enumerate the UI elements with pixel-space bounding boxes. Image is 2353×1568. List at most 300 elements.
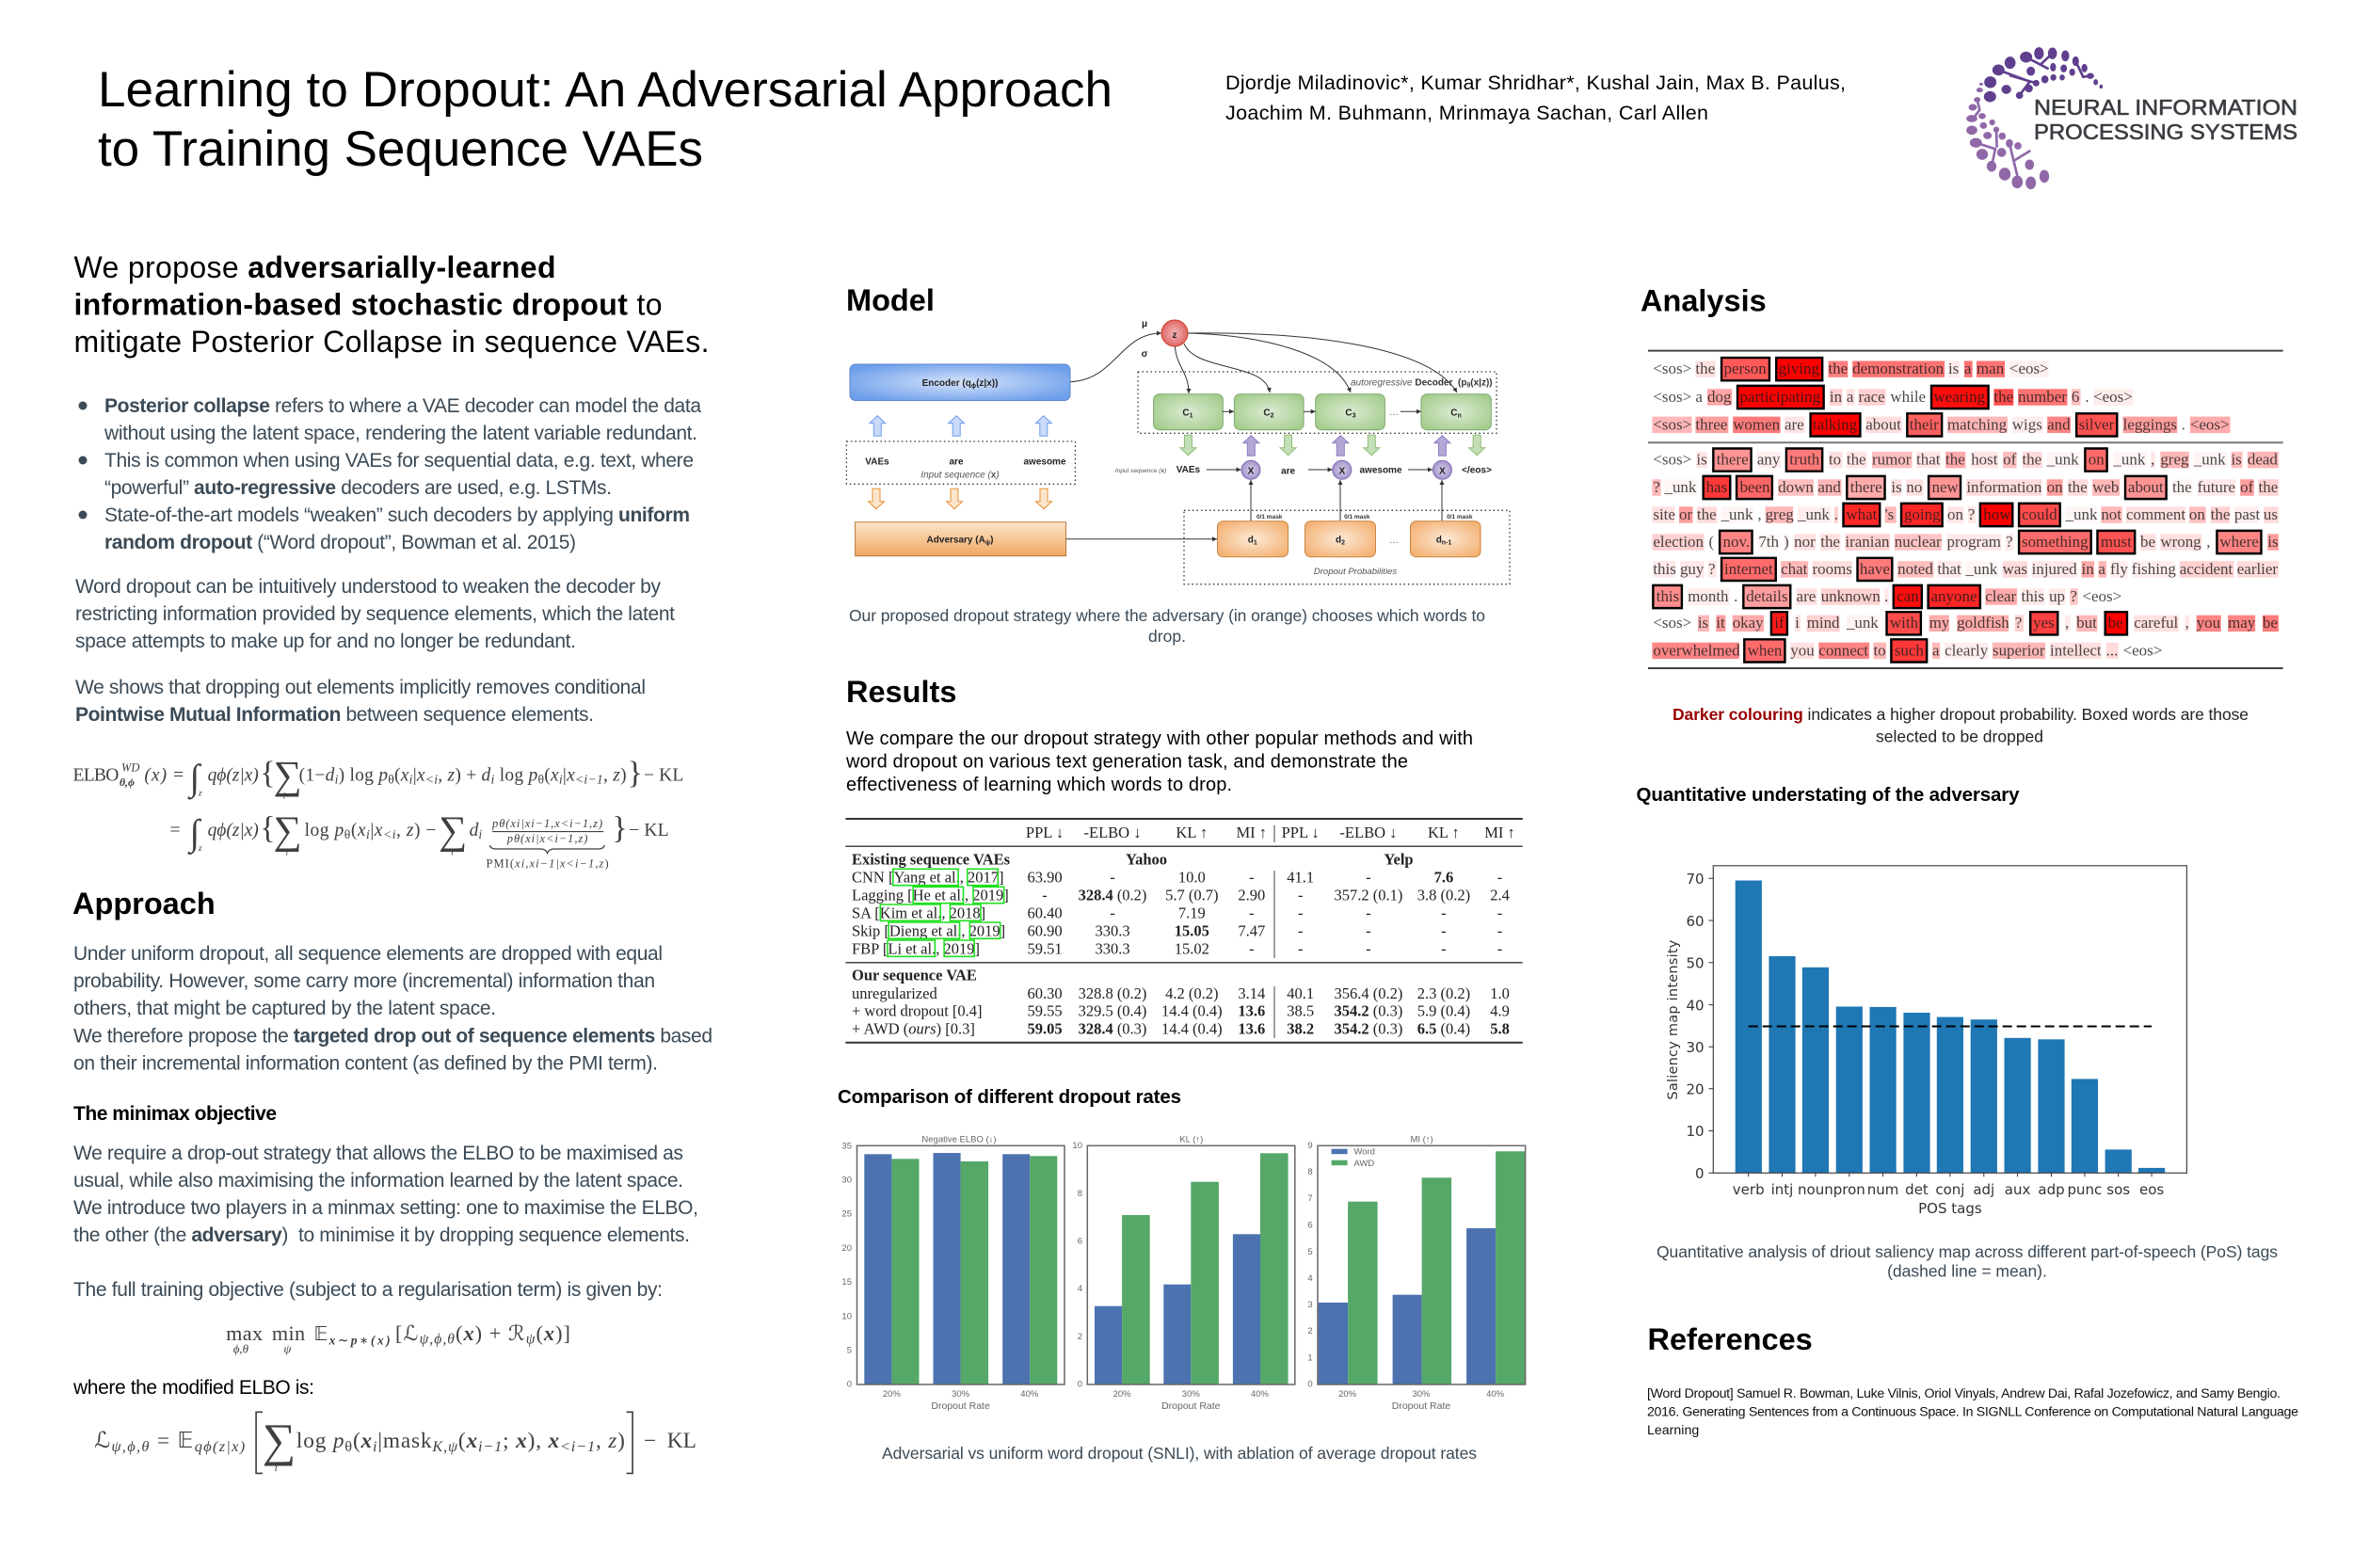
bar chart: KL: 0 — [1078, 1380, 1082, 1389]
sentence row 5: new — [1932, 478, 1960, 496]
sentence row 10: yes — [2033, 614, 2055, 632]
cell labels: n — [1457, 412, 1462, 420]
bar chart: KL: Dropout Rate — [1161, 1400, 1221, 1412]
bar chart: KL: 8 — [1078, 1189, 1082, 1199]
equation: word dropout ELBO: x — [400, 765, 409, 785]
sentence row 5: future — [2198, 478, 2235, 496]
existing VAEs values: 5.7 (0.7) — [1165, 887, 1218, 904]
text block: approach: on their incremental information content (as defined by the PMI term). — [73, 1052, 658, 1075]
sentence row 7: wrong — [2160, 533, 2201, 551]
equation: word dropout ELBO: ∫ — [188, 813, 202, 856]
sentence row 9: unknown — [1821, 587, 1881, 605]
sentence row 10: with — [1890, 614, 1919, 632]
existing VAEs values: - — [1298, 939, 1303, 957]
bar chart: negative ELBO: 20% — [883, 1389, 901, 1400]
x axis labels: sos — [2106, 1181, 2130, 1198]
sentence row 6: greg — [1766, 505, 1794, 523]
equation: word dropout ELBO: i — [366, 827, 370, 841]
our VAE values: 328.4 (0.3) — [1079, 1019, 1146, 1037]
encoder — [850, 364, 1070, 401]
sentence row 1: a — [1964, 360, 1972, 377]
existing VAEs values: - — [1366, 921, 1371, 939]
existing VAEs values: 357.2 (0.1) — [1334, 887, 1402, 904]
sentence row 6: us — [2264, 505, 2278, 523]
sentence row 5: the — [2068, 478, 2088, 496]
logo: NeurIPS — [1967, 48, 2297, 189]
bullet list: posterior collapse: “powerful” auto-regressive decoders are used, e.g. LSTMs. — [104, 477, 612, 499]
sentence row 8: injured — [2032, 560, 2077, 578]
sentence row 8: that — [1937, 560, 1961, 578]
blue up arrows — [870, 416, 1051, 436]
sentence row 1: person — [1723, 360, 1767, 377]
sentence row 9: . — [1884, 587, 1888, 605]
x axis labels: num — [1867, 1181, 1898, 1198]
sentence row 10: <sos> — [1653, 614, 1691, 632]
sentence row 6: the — [2211, 505, 2230, 523]
sentence row 4: dead — [2248, 450, 2278, 468]
equation: word dropout ELBO: } — [628, 756, 643, 791]
sentence row 6: , — [1757, 505, 1762, 523]
sentence row 7: ( — [1708, 533, 1714, 551]
sentence row 6: _unk — [1797, 505, 1830, 523]
sentence row 3: three — [1695, 415, 1727, 433]
caption: saliency: (dashed line = mean). — [1887, 1261, 2047, 1280]
sentence row 4: there — [1717, 450, 1749, 468]
equation: word dropout ELBO: i — [283, 791, 286, 801]
equation: modified ELBO: i — [373, 1437, 377, 1455]
sentence row 11 — [1652, 639, 2162, 663]
cell labels: C — [1182, 408, 1190, 418]
dropout probabilities box: 2 — [1341, 540, 1345, 546]
sentence row 3: silver — [2079, 415, 2115, 433]
sentence row 4: on — [2089, 450, 2105, 468]
encoder: ϕ — [971, 383, 976, 390]
sentence row 8 — [1653, 558, 2279, 581]
equation: word dropout ELBO: z — [198, 843, 202, 854]
existing VAEs values: - — [1042, 887, 1048, 904]
sentence row 4: _unk — [2193, 450, 2226, 468]
sentence row 3: about — [1865, 415, 1901, 433]
sentence row 7: where — [2219, 533, 2259, 551]
sentence row 2: wearing — [1933, 388, 1986, 406]
chart legend: Word — [1353, 1146, 1375, 1158]
bar chart: negative ELBO: 5 — [847, 1346, 852, 1355]
existing VAEs values: - — [1441, 904, 1447, 921]
bar chart: MI: 6 — [1307, 1220, 1313, 1231]
equation: minimax objective: max — [226, 1321, 263, 1345]
decoder input sequence: VAEs — [1176, 465, 1201, 475]
sentence row 6: not — [2101, 505, 2121, 523]
x axis labels: conj — [1935, 1181, 1964, 1198]
existing VAEs rows: Existing sequence VAEs — [852, 851, 1011, 868]
sentence row 10: mind — [1807, 614, 1840, 632]
equation: modified ELBO: − KL — [644, 1429, 696, 1453]
sentence row 8: earlier — [2237, 560, 2278, 578]
equation: modified ELBO: ; — [503, 1429, 515, 1453]
heading: minimax objective: The minimax objective — [73, 1103, 277, 1125]
sentence row 4: of — [2003, 450, 2017, 468]
table header — [1026, 824, 1515, 841]
text: where the modified ELBO is: where the modified ELBO is: — [72, 1377, 314, 1399]
sentence row 5: _unk — [1663, 478, 1697, 496]
text block: word dropout explanation: Word dropout can be intuitively understood to weaken the decoder by — [75, 576, 661, 598]
sentence row 4: the — [1945, 450, 1965, 468]
existing VAEs values: - — [1298, 921, 1303, 939]
our VAE values: 1.0 — [1490, 984, 1510, 1002]
input sequence box: VAEs — [865, 457, 889, 467]
authors — [1225, 72, 1846, 124]
sentence row 6: site — [1653, 505, 1675, 523]
equation: minimax objective: ψ — [283, 1342, 292, 1356]
sentence row 8: was — [2003, 560, 2027, 578]
existing VAEs rows: CNN [Yang et al., 2017] — [852, 869, 1003, 887]
sentence row 11: overwhelmed — [1653, 641, 1740, 659]
bar chart: MI: 5 — [1307, 1247, 1313, 1257]
bar chart: MI: 1 — [1307, 1353, 1313, 1363]
our VAE values: 4.2 (0.2) — [1165, 984, 1218, 1002]
sentence row 10: ? — [2015, 614, 2022, 632]
title — [98, 62, 1112, 177]
sentence row 6: . — [1834, 505, 1838, 523]
bar chart: MI: 9 — [1307, 1141, 1313, 1151]
sentence row 9: details — [1746, 587, 1787, 605]
sentence row 6: on — [2189, 505, 2205, 523]
existing VAEs values: 60.90 — [1027, 921, 1063, 939]
sentence row 4: host — [1971, 450, 1998, 468]
our VAE values: 6.5 (0.4) — [1417, 1019, 1470, 1037]
existing VAEs values: - — [1110, 904, 1115, 921]
bar chart: negative ELBO: 10 — [841, 1312, 852, 1321]
existing VAEs rows: Lagging [He et al., 2019] — [852, 887, 1009, 904]
dropout probabilities box: n-1 — [1442, 540, 1451, 546]
sentence row 9: can — [1897, 587, 1919, 605]
existing VAEs values: - — [1298, 887, 1303, 904]
x axis labels: det — [1905, 1181, 1929, 1198]
equation: minimax objective — [226, 1321, 570, 1355]
sentence row 3: their — [1910, 415, 1939, 433]
equation: minimax objective: ψ,ϕ,θ — [420, 1332, 455, 1348]
sentence row 1: the — [1828, 360, 1848, 377]
sentence row 9: <eos> — [2082, 587, 2121, 605]
input sequence box: awesome — [1023, 457, 1066, 467]
our VAE rows — [852, 967, 983, 1037]
sentence row 11: when — [1748, 641, 1783, 659]
equation: word dropout ELBO: pθ(xi|x<i−1,z) — [506, 832, 587, 845]
sentence row 5: web — [2092, 478, 2119, 496]
diagram: model architecture: z — [1173, 330, 1176, 341]
y axis labels: 60 — [1687, 913, 1705, 930]
y axis labels: 30 — [1687, 1039, 1705, 1056]
equation: modified ELBO: ∑ — [263, 1415, 296, 1466]
equation: word dropout ELBO: i — [409, 773, 413, 787]
sentence row 8: ? — [1708, 560, 1716, 578]
equation: minimax objective: x)] — [544, 1321, 570, 1345]
equation: word dropout ELBO: z) + d — [447, 765, 490, 785]
curve from encoder to z — [1070, 333, 1161, 382]
bullet list: posterior collapse: State-of-the-art models “weaken” such decoders by applying uniform — [104, 504, 690, 526]
sentence row 7: must — [2101, 533, 2132, 551]
sentence row 5: no — [1906, 478, 1922, 496]
equation: modified ELBO: θ — [344, 1437, 352, 1455]
existing VAEs values — [1027, 869, 1510, 957]
existing VAEs rows: Yelp — [1384, 851, 1414, 868]
our VAE values: 60.30 — [1027, 984, 1063, 1002]
equation: modified ELBO: x — [360, 1429, 373, 1453]
y axis title: Saliency map intensity — [1666, 939, 1681, 1100]
sentence row 5: on — [2047, 478, 2063, 496]
bullet list: posterior collapse: without using the latent space, rendering the latent variable redundant. — [104, 423, 697, 444]
existing VAEs rows: FBP [Li et al., 2019] — [852, 939, 980, 957]
equation: word dropout ELBO: <i — [383, 827, 396, 841]
equation: word dropout ELBO: i — [286, 848, 289, 858]
bullet list: posterior collapse: Posterior collapse refers to where a VAE decoder can model the data — [104, 395, 701, 417]
equation: minimax objective: ( — [536, 1321, 543, 1345]
bullet list: posterior collapse — [79, 395, 701, 553]
decoder box: θ — [1466, 382, 1470, 390]
existing VAEs values: - — [1497, 869, 1502, 887]
our VAE rows: Our sequence VAE — [852, 967, 977, 984]
sentence row 10 — [1653, 612, 2279, 634]
sentence row 9: up — [2049, 587, 2065, 605]
existing VAEs values: 7.47 — [1238, 921, 1265, 939]
equation: word dropout ELBO: p — [376, 765, 388, 785]
x axis labels: noun — [1798, 1181, 1833, 1198]
sentence row 8: accident — [2180, 560, 2233, 578]
bar chart: MI: 30% — [1412, 1389, 1431, 1400]
bar chart: MI: MI (↑) — [1410, 1135, 1433, 1144]
bar chart: MI: 2 — [1307, 1326, 1313, 1336]
intro statement: mitigate Posterior Collapse in sequence VAEs. — [73, 325, 710, 359]
existing VAEs values: - — [1366, 904, 1371, 921]
equation: word dropout ELBO: WD — [121, 761, 139, 775]
equation: word dropout ELBO: | — [563, 765, 567, 785]
adversary: ψ — [985, 540, 990, 546]
sentence row 2: <sos> — [1653, 388, 1691, 406]
sentence row 10: be — [2108, 614, 2123, 632]
existing VAEs values: - — [1249, 939, 1255, 957]
sentence row 7: , — [2206, 533, 2211, 551]
sentence row 6: comment — [2126, 505, 2185, 523]
sentence row 7: program — [1946, 533, 2001, 551]
decoder box: (x|z)) — [1470, 378, 1493, 388]
bar chart: MI — [1307, 1135, 1526, 1412]
equation: word dropout ELBO — [73, 754, 683, 871]
sentence row 11: you — [1790, 641, 1815, 659]
existing VAEs values: - — [1497, 904, 1502, 921]
bar chart: negative ELBO: 0 — [847, 1380, 852, 1389]
equation: word dropout ELBO: d — [470, 821, 478, 840]
text block: word dropout explanation: restricting information provided by sequence elements, which the latent — [75, 603, 675, 625]
equation: word dropout ELBO: } — [612, 811, 628, 846]
y axis labels: 10 — [1687, 1123, 1705, 1140]
our VAE values: 2.3 (0.2) — [1417, 984, 1470, 1002]
sentence row 9 — [1653, 585, 2121, 608]
sentence row 10: , — [2065, 614, 2069, 632]
equation: word dropout ELBO: x — [550, 765, 559, 785]
sentence row 5: down — [1778, 478, 1814, 496]
equation: word dropout ELBO: x — [374, 821, 383, 840]
mask multiply nodes: X — [1439, 467, 1446, 476]
x axis labels: punc — [2068, 1181, 2102, 1198]
x axis labels — [1733, 1181, 2164, 1217]
equation: word dropout ELBO: z) − — [407, 821, 436, 840]
existing VAEs values: - — [1249, 869, 1255, 887]
sentence row 2: participating — [1739, 388, 1821, 406]
equation: modified ELBO: = — [151, 1429, 176, 1453]
references text: Learning — [1647, 1423, 1699, 1438]
equation: word dropout ELBO: i — [559, 773, 563, 787]
equation: modified ELBO: ψ,ϕ,θ — [111, 1437, 149, 1455]
equation: modified ELBO: x), x — [516, 1429, 559, 1453]
text block: approach: Under uniform dropout, all sequence elements are dropped with equal — [73, 943, 663, 965]
sentence row 10: my — [1929, 614, 1950, 632]
decoder box: autoregressive Decoder — [1351, 378, 1452, 388]
bar chart: KL: 30% — [1182, 1389, 1200, 1400]
equation: word dropout ELBO: qϕ(z|x) — [208, 765, 259, 785]
our VAE rows: + word dropout [0.4] — [852, 1001, 983, 1020]
sentence row 2: <eos> — [2093, 388, 2133, 406]
bar chart: negative ELBO: 15 — [841, 1277, 852, 1288]
logo: NeurIPS: NEURAL INFORMATION — [2034, 95, 2297, 120]
input sequence box — [846, 441, 1075, 484]
equation: minimax objective: x) + ℛ — [463, 1321, 525, 1346]
bar chart: saliency by POS tag — [1666, 866, 2186, 1217]
equation: word dropout ELBO: <i−1 — [575, 773, 603, 787]
existing VAEs values: 7.6 — [1434, 869, 1453, 887]
x axis labels: POS tags — [1918, 1200, 1982, 1217]
sentence row 4 — [1653, 448, 2279, 472]
existing VAEs values: 330.3 — [1095, 921, 1130, 939]
table header: -ELBO ↓ — [1339, 824, 1397, 841]
curves from z to decoder cells — [1175, 333, 1457, 393]
heading: Results: Results — [846, 675, 956, 709]
sentence row 9: . — [1734, 587, 1737, 605]
existing VAEs rows: Skip [Dieng et al., 2019] — [852, 921, 1005, 939]
equation: word dropout ELBO: , — [438, 765, 447, 785]
sentence row 3: wigs — [2012, 415, 2042, 433]
cell to cell arrows — [1223, 410, 1421, 412]
equation: word dropout ELBO: pθ(xi|xi−1,x<i−1,z) — [491, 817, 602, 830]
equation: word dropout ELBO: θ — [388, 773, 394, 787]
sentence row 7: be — [2140, 533, 2155, 551]
sentence row 8: chat — [1781, 560, 1808, 578]
purple up arrows — [1243, 436, 1450, 456]
equation: minimax objective: 𝔼 — [313, 1322, 328, 1345]
sentence row 4: the — [2022, 450, 2041, 468]
sentence row 10: it — [1716, 614, 1725, 632]
equation: word dropout ELBO: i — [491, 773, 495, 787]
sentence row 9: are — [1797, 587, 1816, 605]
heading: quantitative understanding: Quantitative understating of the adversary — [1636, 784, 2020, 806]
equation: minimax objective: min — [272, 1321, 305, 1345]
sentence row 8: noted — [1897, 560, 1933, 578]
equation: modified ELBO: z) — [608, 1429, 625, 1453]
sentence row 4: greg — [2160, 450, 2189, 468]
decoder cells — [1154, 394, 1491, 430]
sentence row 3: matching — [1947, 415, 2008, 433]
sentence row 10: be — [2263, 614, 2278, 632]
table header: MI ↑ — [1237, 824, 1267, 841]
text block: approach: We therefore propose the targeted drop out of sequence elements based — [73, 1026, 712, 1047]
cell labels: C — [1263, 408, 1271, 418]
intro statement: information-based stochastic dropout to — [73, 288, 663, 322]
sentence row 8: a — [2098, 560, 2105, 578]
sentence row 6 — [1652, 504, 2279, 526]
sentence row 7: the — [1820, 533, 1840, 551]
text block: word dropout explanation: Pointwise Mutual Information between sequence elements. — [75, 704, 594, 726]
equation: minimax objective: ϕ,θ — [233, 1342, 249, 1356]
equation: modified ELBO: ( — [458, 1429, 466, 1453]
equation: modified ELBO: ℒ — [94, 1428, 110, 1453]
sentence row 5: has — [1706, 478, 1727, 496]
sentence row 11: ... — [2106, 641, 2118, 659]
orange down arrows — [868, 488, 1052, 509]
sentence row 6: how — [1983, 505, 2011, 523]
decoder input sequence: are — [1281, 467, 1296, 476]
text block: results: effectiveness of learning which words to drop. — [846, 775, 1232, 795]
equation: word dropout ELBO: | — [413, 765, 417, 785]
sentence row 6: on — [1947, 505, 1963, 523]
equation: modified ELBO: x — [466, 1429, 478, 1453]
sentence row 2: 6 — [2072, 388, 2079, 406]
equation: minimax objective: ψ — [526, 1332, 536, 1348]
equation: word dropout ELBO: θ,ϕ — [120, 776, 135, 789]
bar chart: KL: 40% — [1251, 1389, 1270, 1400]
sentence row 6: _unk — [2065, 505, 2098, 523]
table header: KL ↑ — [1176, 824, 1208, 841]
existing VAEs values: 41.1 — [1287, 869, 1314, 887]
sentence row 10: , — [2185, 614, 2189, 632]
equation: word dropout ELBO: θ — [537, 773, 544, 787]
sentence row 4: <sos> — [1653, 450, 1691, 468]
x axis labels: verb — [1733, 1181, 1765, 1198]
sentence row 6: going — [1904, 505, 1941, 523]
cell labels: 1 — [1190, 412, 1193, 420]
existing VAEs rows: Yahoo — [1126, 851, 1167, 868]
dropout probabilities box: 0/1 mask — [1257, 514, 1283, 520]
bar chart: negative ELBO: 25 — [841, 1208, 852, 1220]
equation: word dropout ELBO: { — [260, 756, 276, 791]
existing VAEs values: - — [1366, 869, 1371, 887]
sentence row 7: nov. — [1723, 533, 1750, 551]
diagram: model architecture: μ — [1142, 319, 1147, 329]
decoder input sequence — [1115, 465, 1492, 476]
bullet list: posterior collapse: This is common when using VAEs for sequential data, e.g. text, where — [104, 450, 694, 472]
sentence row 6: could — [2022, 505, 2057, 523]
sentence row 2: race — [1858, 388, 1885, 406]
input sequence box: are — [949, 457, 964, 467]
equation: word dropout ELBO: <i — [425, 773, 438, 787]
sentence row 5: ? — [1653, 478, 1660, 496]
sentence row 4: the — [1847, 450, 1866, 468]
sentence row 11: connect — [1818, 641, 1868, 659]
y axis labels: 20 — [1687, 1080, 1705, 1097]
our VAE values: 4.9 — [1490, 1001, 1510, 1020]
decoder box — [1138, 372, 1497, 433]
dropout probabilities box: d — [1436, 535, 1442, 546]
sentence row 6: the — [1697, 505, 1717, 523]
decoder input sequence: </eos> — [1462, 465, 1492, 476]
sentence row 8: in — [2081, 560, 2094, 578]
sentence row 5: the — [2259, 478, 2278, 496]
bar chart: KL: 6 — [1078, 1237, 1082, 1246]
caption: analysis: Darker colouring indicates a higher dropout probability. Boxed words are those — [1673, 705, 2249, 724]
bar chart: negative ELBO: 40% — [1020, 1389, 1039, 1400]
equation: word dropout ELBO: i — [478, 827, 482, 841]
sentence row 6: what — [1846, 505, 1878, 523]
mean dashed line — [1749, 1026, 2152, 1028]
equation: word dropout ELBO: ) log — [339, 765, 378, 785]
